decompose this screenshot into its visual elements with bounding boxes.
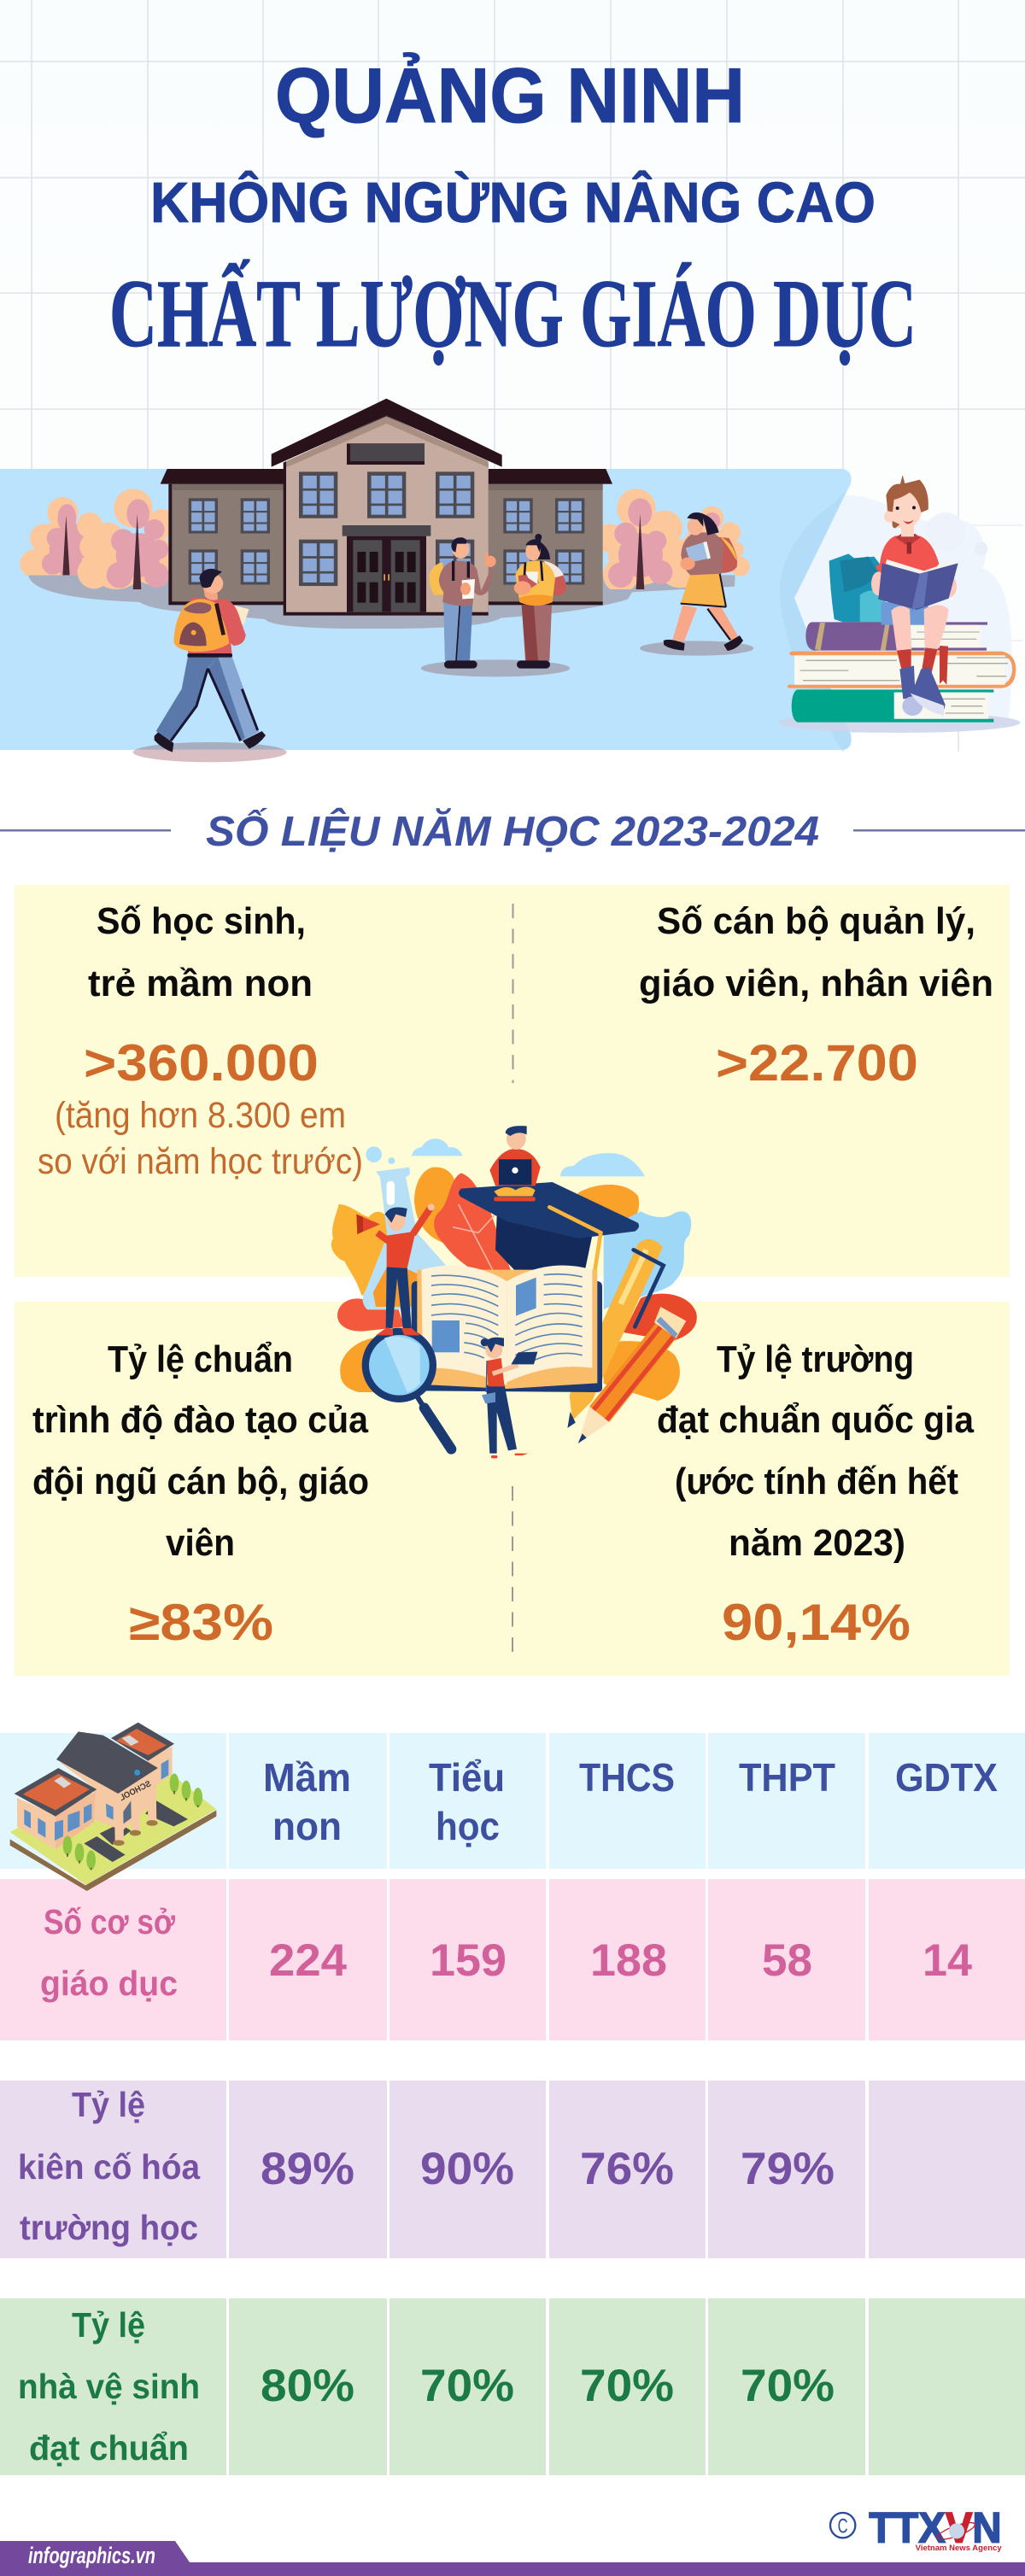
row: education facilities: 14 (922, 1935, 973, 1986)
row: standard toilets rate: 70% (580, 2361, 674, 2411)
stat: students (38, 900, 363, 1182)
row: education facilities: 188 (590, 1935, 667, 1986)
copyright mark: C (838, 2515, 848, 2538)
row: solid school rate: 79% (741, 2144, 835, 2194)
icon: education illustration (331, 1126, 697, 1458)
stat: national standard schools (657, 1338, 974, 1651)
copyright mark (830, 2513, 855, 2538)
building and trees (20, 399, 750, 629)
label (32, 1338, 369, 1564)
table header row (0, 1733, 1025, 1869)
boy body (882, 602, 928, 625)
label: (ước tính đến hết (675, 1461, 958, 1502)
right wing (143, 1747, 173, 1785)
note (38, 1095, 363, 1182)
right wing (489, 484, 603, 605)
note: (tăng hơn 8.300 em (55, 1095, 346, 1136)
row: solid school rate: trường học (20, 2208, 198, 2247)
trees right (595, 489, 750, 593)
heading rule right (853, 829, 1025, 832)
hero illustration: school and students (0, 399, 1020, 762)
boy reading on books (778, 475, 1020, 733)
person on cap (489, 1149, 541, 1186)
row: solid school rate: Tỷ lệ (72, 2085, 145, 2124)
title (109, 52, 917, 367)
row: solid school rate: 89% (261, 2144, 354, 2194)
globe (935, 2520, 976, 2543)
label: trẻ mầm non (88, 963, 313, 1004)
blue ground band (0, 469, 852, 750)
row: solid school rate: 76% (580, 2144, 674, 2194)
value: >22.700 (716, 1034, 918, 1092)
label: viên (166, 1522, 235, 1564)
label: Tỷ lệ chuẩn (108, 1338, 293, 1380)
table header row: GDTX (895, 1755, 998, 1800)
label: Số học sinh, (97, 900, 306, 942)
row: standard toilets rate: 70% (420, 2361, 514, 2411)
open book (412, 1281, 602, 1392)
row: education facilities: 159 (430, 1935, 507, 1986)
panel: bottom statistics (15, 1302, 1010, 1676)
label: năm 2023) (729, 1522, 905, 1564)
value: 90,14% (722, 1594, 911, 1651)
logo: TTXVN (830, 2504, 1002, 2552)
row: standard toilets rate: nhà vệ sinh (18, 2367, 200, 2406)
label: Tỷ lệ trường (717, 1338, 914, 1380)
trees left (20, 497, 85, 576)
value: ≥83% (129, 1594, 273, 1651)
label: Số cán bộ quản lý, (657, 900, 975, 942)
divider bottom (512, 1486, 513, 1656)
center (60, 1762, 156, 1830)
label (88, 900, 313, 1004)
divider top (512, 904, 514, 1083)
title line 1: QUẢNG NINH (275, 52, 745, 139)
row: education facilities: Số cơ sở (44, 1902, 176, 1941)
label (639, 900, 993, 1004)
agency name: Vietnam News Agency (916, 2544, 1002, 2552)
label (657, 1338, 974, 1564)
icon: isometric school (10, 1723, 216, 1891)
row: solid school rate: kiên cố hóa (18, 2147, 201, 2187)
footer tab (0, 2541, 190, 2562)
pen (570, 1239, 663, 1420)
label: đội ngũ cán bộ, giáo (32, 1461, 369, 1502)
left wing (17, 1798, 56, 1849)
girl (551, 562, 566, 595)
person with laptop (486, 1385, 517, 1454)
row: education facilities: giáo dục (40, 1964, 178, 2003)
table header row: THCS (579, 1755, 675, 1800)
value: >360.000 (84, 1034, 319, 1092)
row: solid school rate: 90% (420, 2144, 514, 2194)
row: standard toilets rate: Tỷ lệ (72, 2305, 145, 2345)
row: standard toilets rate: đạt chuẩn (29, 2428, 189, 2468)
left wing (168, 484, 284, 605)
row: standard toilets rate: 70% (741, 2361, 835, 2411)
row: solid school rate (0, 2081, 1025, 2258)
table header row: học (436, 1804, 500, 1848)
label: giáo viên, nhân viên (639, 963, 993, 1004)
students talking (421, 534, 570, 676)
backpack (829, 553, 888, 622)
heading rule left (0, 829, 171, 832)
graduation cap (495, 1215, 592, 1274)
magnifier (417, 1396, 425, 1408)
boy (430, 562, 444, 595)
footer bar (0, 2541, 1025, 2576)
table (0, 1733, 1025, 2475)
central block (284, 416, 489, 616)
table header row: non (272, 1804, 342, 1848)
icon: isometric school: SCHOOL (118, 1779, 153, 1803)
person with megaphone (386, 1267, 412, 1328)
purple book (805, 622, 987, 651)
row: education facilities: 224 (269, 1935, 348, 1986)
stat: qualification rate (32, 1338, 369, 1651)
panel: top statistics (15, 885, 1010, 1277)
label: trình độ đào tạo của (32, 1399, 368, 1441)
stat: staff (639, 900, 993, 1092)
green book (792, 689, 993, 723)
row: standard toilets rate (0, 2298, 1025, 2475)
source text: infographics.vn (28, 2543, 155, 2568)
row: education facilities: 58 (762, 1935, 812, 1986)
row: standard toilets rate: 80% (261, 2361, 354, 2411)
orange book (788, 652, 1016, 688)
trees (63, 1773, 202, 1870)
label: đạt chuẩn quốc gia (657, 1399, 974, 1441)
row: education facilities (0, 1879, 1025, 2040)
wordmark: TTXVN (869, 2504, 1002, 2552)
pencil (589, 1322, 676, 1422)
footer band (0, 2562, 1025, 2576)
table header row: THPT (739, 1755, 835, 1800)
table header row: Tiểu (429, 1755, 505, 1800)
student walking right (640, 512, 753, 656)
title line 2: KHÔNG NGỪNG NÂNG CAO (150, 171, 876, 235)
table header row: Mầm (263, 1755, 351, 1800)
heading text: SỐ LIỆU NĂM HỌC 2023-2024 (206, 808, 819, 855)
student walking left (133, 569, 287, 762)
ground shadow (28, 575, 735, 629)
note: so với năm học trước) (38, 1141, 363, 1182)
pale blob behind reading boy (780, 495, 1012, 735)
